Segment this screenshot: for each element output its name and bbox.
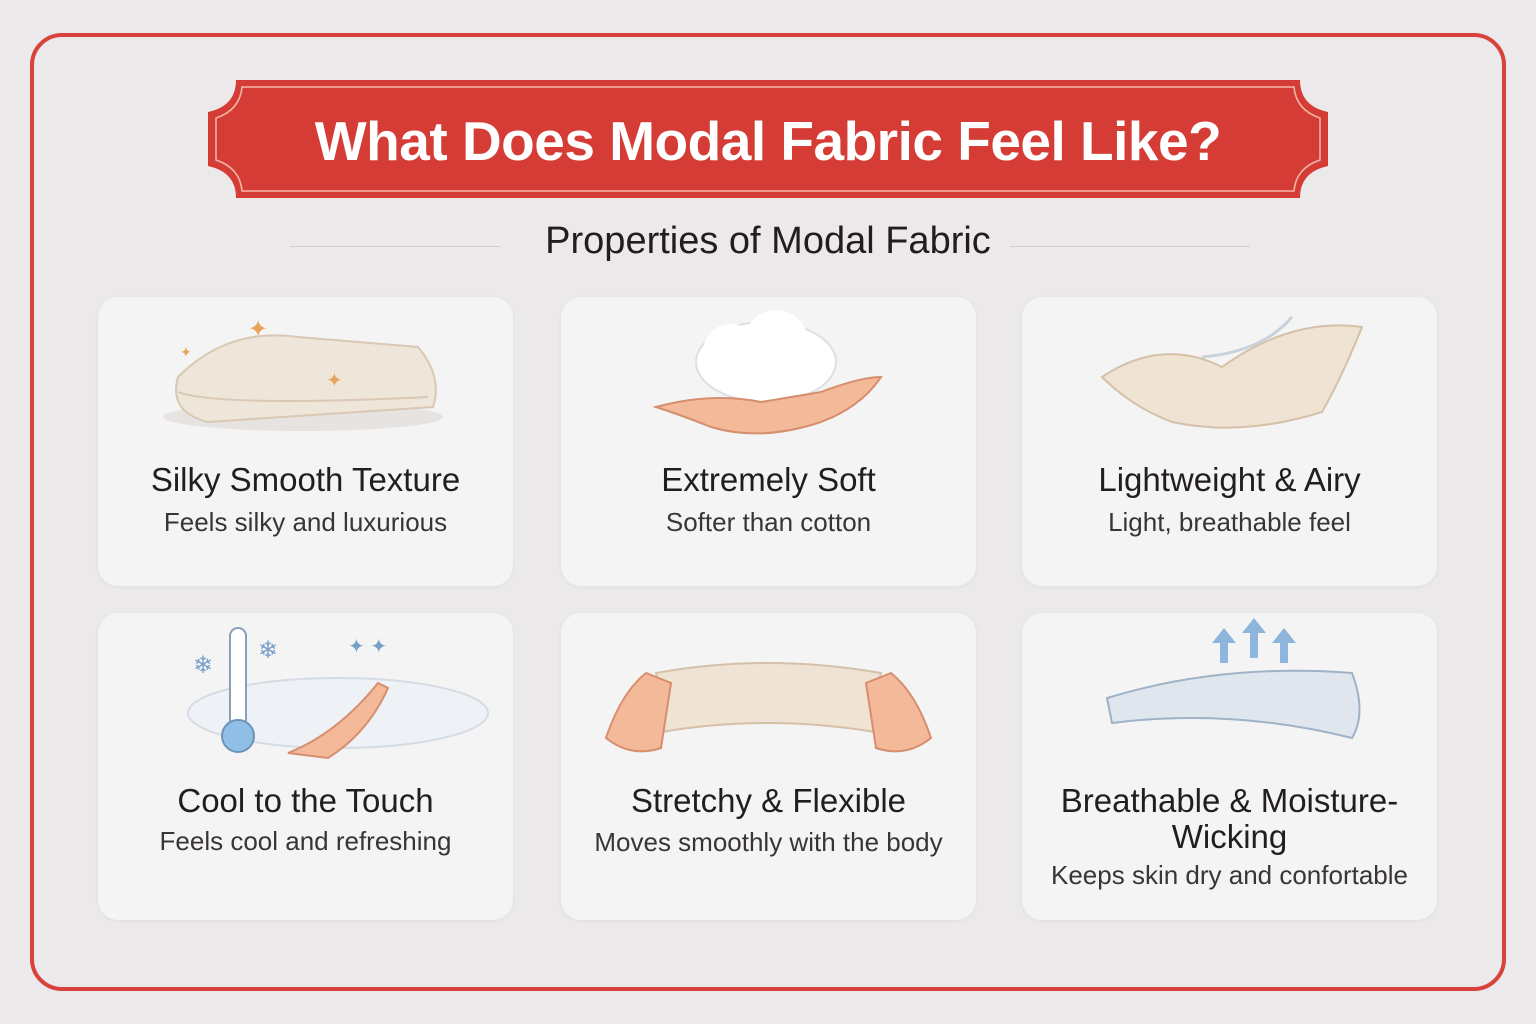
icon: folded fabric [163,316,443,431]
card: breathable [1022,613,1437,920]
card: lightweight [1022,297,1437,586]
icon: thermometer and hand: ✦ ✦ [348,636,387,658]
title: Lightweight & Airy [1098,461,1361,498]
title: Breathable & Moisture- [1061,782,1398,819]
icon: folded fabric: ✦ [326,370,343,392]
icon: folded fabric: ✦ [248,316,268,343]
title: Wicking [1172,818,1287,855]
icon: folded fabric: ✦ [180,344,192,360]
card: silky [98,297,513,586]
icon: flowing fabric [1100,316,1364,429]
title [1061,782,1398,855]
title: Cool to the Touch [177,782,434,819]
icon: cloud in hand [652,310,883,434]
text: Light, breathable feel [1108,507,1351,537]
text: Keeps skin dry and confortable [1051,860,1408,890]
text: Feels cool and refreshing [160,826,451,856]
icon: stretched fabric [604,662,932,752]
title banner [208,80,1328,198]
subtitle: Properties of Modal Fabric [545,220,991,262]
title: Extremely Soft [661,461,876,498]
card: stretchy [561,613,976,920]
title: Silky Smooth Texture [151,461,460,498]
icon: thermometer and hand [187,627,489,759]
title: Stretchy & Flexible [631,782,906,819]
icon: thermometer and hand: ❄ [258,637,278,664]
icon: thermometer and hand: ❄ [193,652,213,679]
card: cool [98,613,513,920]
card: soft [561,297,976,586]
text: Softer than cotton [666,507,871,537]
text: Feels silky and luxurious [164,507,447,537]
icon: fabric with arrows [1106,618,1360,740]
text: Moves smoothly with the body [594,827,943,857]
title: What Does Modal Fabric Feel Like? [315,110,1221,172]
